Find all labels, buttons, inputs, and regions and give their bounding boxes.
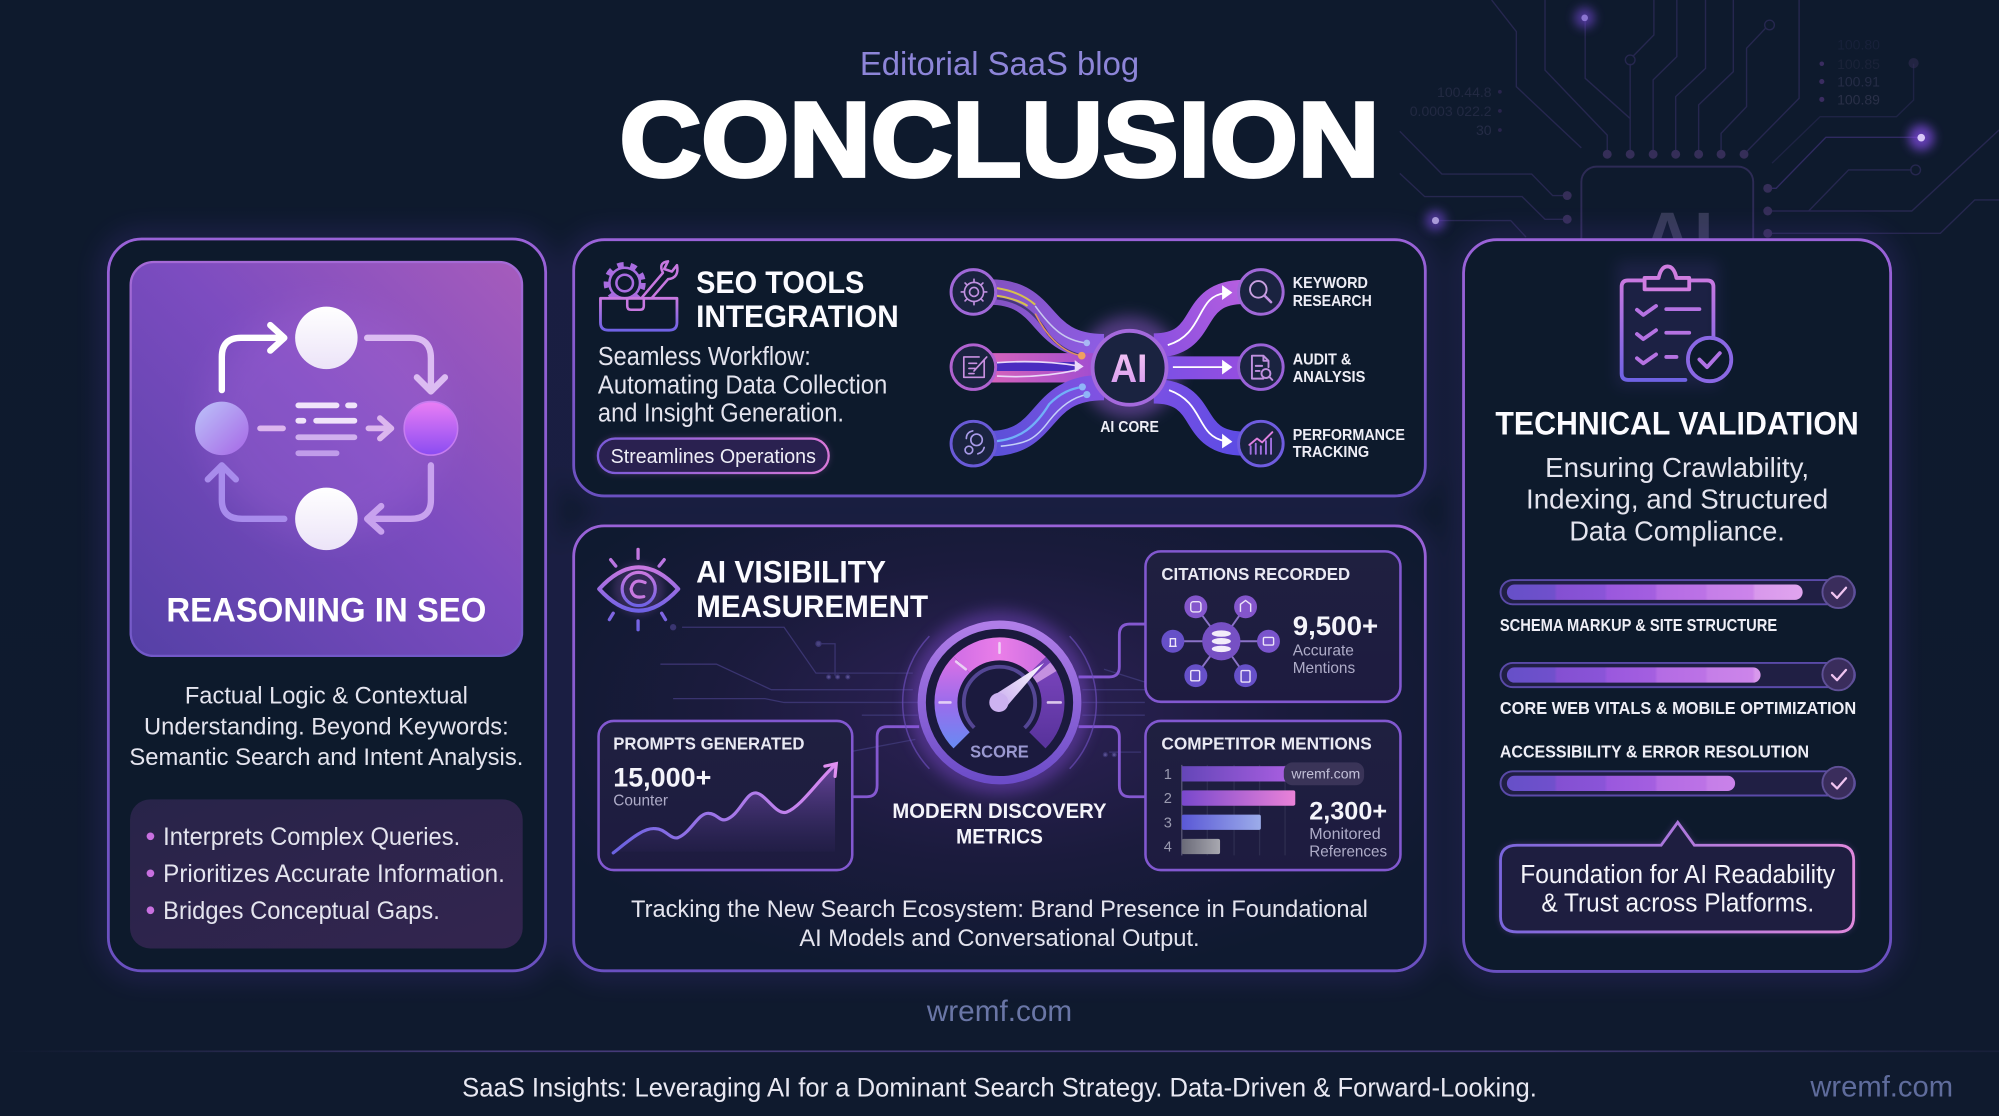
card: competitor mentions: 2,300+	[1309, 799, 1387, 826]
AI core node	[1093, 331, 1167, 405]
background circuit board	[1400, 0, 1999, 281]
gauge: score	[903, 611, 1096, 794]
card: prompts generated: Counter	[613, 793, 669, 810]
description: and Insight Generation.	[598, 399, 844, 427]
output labels: ANALYSIS	[1293, 369, 1365, 386]
icon: reasoning cycle	[195, 306, 458, 550]
footer	[0, 1050, 1999, 1103]
output labels: TRACKING	[1293, 444, 1369, 461]
bullet list: Interprets Complex Queries.	[163, 824, 460, 851]
card: competitor mentions: Monitored	[1309, 826, 1381, 843]
heading: INTEGRATION	[696, 298, 899, 334]
network icon	[1161, 595, 1280, 687]
background circuit board: 0.0003 022.2	[1410, 103, 1492, 119]
connector lines	[853, 624, 1145, 797]
output labels: RESEARCH	[1293, 293, 1372, 310]
background circuit board: 100.44.8	[1437, 84, 1492, 100]
bullet list: Bridges Conceptual Gaps.	[163, 898, 440, 925]
description: AI Models and Conversational Output.	[799, 925, 1200, 952]
progress: schema markup: SCHEMA MARKUP & SITE STRUCTURE	[1500, 615, 1777, 635]
label: modern discovery metrics	[892, 798, 1107, 848]
line chart	[613, 764, 836, 853]
output labels: KEYWORD	[1293, 275, 1368, 292]
bullet list	[130, 799, 523, 948]
hero card	[131, 262, 522, 656]
card: citations recorded: CITATIONS RECORDED	[1161, 564, 1350, 584]
progress: schema markup	[1500, 576, 1855, 635]
background circuit board: AI	[1642, 198, 1713, 276]
label: modern discovery metrics: METRICS	[956, 823, 1043, 848]
watermark: wremf.com	[926, 995, 1072, 1028]
gauge: score: SCORE	[970, 741, 1029, 761]
card: prompts generated	[599, 721, 852, 870]
output labels	[1293, 275, 1405, 461]
heading: MEASUREMENT	[696, 588, 929, 624]
background circuit board: 100.89	[1837, 92, 1880, 108]
description: Understanding. Beyond Keywords:	[144, 713, 509, 740]
title: CONCLUSION	[620, 81, 1379, 199]
description: Data Compliance.	[1569, 516, 1785, 547]
progress: accessibility: ACCESSIBILITY & ERROR RESOLUTION	[1500, 741, 1809, 761]
card: citations recorded: Mentions	[1293, 660, 1355, 677]
description: Tracking the New Search Ecosystem: Brand Presence in Foundational	[631, 896, 1368, 923]
progress: core web vitals: CORE WEB VITALS & MOBILE OPTIMIZATION	[1500, 698, 1856, 718]
heading: REASONING IN SEO	[166, 591, 486, 629]
pill: streamlines operations	[598, 439, 829, 473]
icon: toolbox	[600, 261, 677, 330]
bullet list: Prioritizes Accurate Information.	[163, 861, 505, 888]
heading: AI VISIBILITY	[696, 554, 886, 590]
description	[129, 683, 523, 771]
card: citations recorded: Accurate	[1293, 642, 1354, 659]
description: Factual Logic & Contextual	[185, 683, 468, 710]
callout	[1501, 822, 1854, 932]
panel: SEO tools integration	[574, 240, 1425, 496]
flow bands	[989, 286, 1244, 447]
card: prompts generated: PROMPTS GENERATED	[613, 734, 805, 754]
bar chart: 4	[1164, 840, 1172, 856]
output labels: AUDIT &	[1293, 352, 1351, 369]
input nodes	[951, 270, 996, 466]
panel: technical validation	[1464, 240, 1891, 971]
panel: reasoning in SEO	[108, 239, 546, 971]
description: Seamless Workflow:	[598, 343, 811, 371]
footer: wremf.com	[1809, 1070, 1953, 1103]
description: Ensuring Crawlability,	[1545, 452, 1809, 483]
AI core node: AI	[1110, 347, 1147, 391]
card: citations recorded: 9,500+	[1293, 611, 1378, 641]
bar chart: 1	[1164, 767, 1172, 783]
bar chart: 2	[1164, 791, 1172, 807]
label: modern discovery metrics: MODERN DISCOVERY	[892, 798, 1107, 823]
bar chart: 3	[1164, 815, 1172, 831]
description	[631, 896, 1368, 952]
panel glows	[108, 239, 1891, 971]
heading: TECHNICAL VALIDATION	[1495, 406, 1859, 442]
subtitle: Editorial SaaS blog	[860, 46, 1139, 83]
bar chart	[1164, 762, 1364, 856]
progress: core web vitals	[1500, 658, 1856, 718]
card: prompts generated: 15,000+	[613, 763, 711, 793]
label: AI core: AI CORE	[1100, 419, 1159, 436]
card: competitor mentions: COMPETITOR MENTIONS	[1161, 734, 1372, 754]
description	[1526, 452, 1828, 547]
description: Automating Data Collection	[598, 371, 887, 399]
output nodes	[1239, 270, 1283, 466]
description: Semantic Search and Intent Analysis.	[129, 744, 523, 771]
circuit traces	[660, 625, 1145, 757]
background circuit board: 100.85	[1837, 56, 1880, 72]
background circuit board: 30	[1476, 122, 1492, 138]
card: competitor mentions	[1145, 721, 1400, 870]
progress: accessibility	[1500, 741, 1855, 799]
heading	[696, 264, 899, 334]
icon: eye	[599, 549, 678, 630]
callout: & Trust across Platforms.	[1541, 890, 1814, 918]
heading	[696, 554, 929, 624]
callout: Foundation for AI Readability	[1520, 861, 1835, 889]
pill: streamlines operations: Streamlines Operations	[611, 446, 816, 468]
description: Indexing, and Structured	[1526, 484, 1828, 515]
background circuit board: 100.80	[1837, 37, 1880, 53]
card: citations recorded	[1145, 551, 1400, 702]
bar chart: wremf.com	[1290, 765, 1360, 781]
output labels: PERFORMANCE	[1293, 427, 1405, 444]
heading: SEO TOOLS	[696, 264, 864, 300]
flow diagram: AI core	[951, 270, 1405, 466]
icon: clipboard	[1617, 261, 1731, 386]
card: competitor mentions: References	[1309, 844, 1387, 861]
footer: SaaS Insights: Leveraging AI for a Dominant Search Strategy. Data-Driven & Forward-Looking.	[462, 1072, 1537, 1102]
background circuit board: 100.91	[1837, 74, 1880, 90]
description	[598, 343, 887, 427]
panel: AI visibility measurement	[574, 526, 1425, 971]
